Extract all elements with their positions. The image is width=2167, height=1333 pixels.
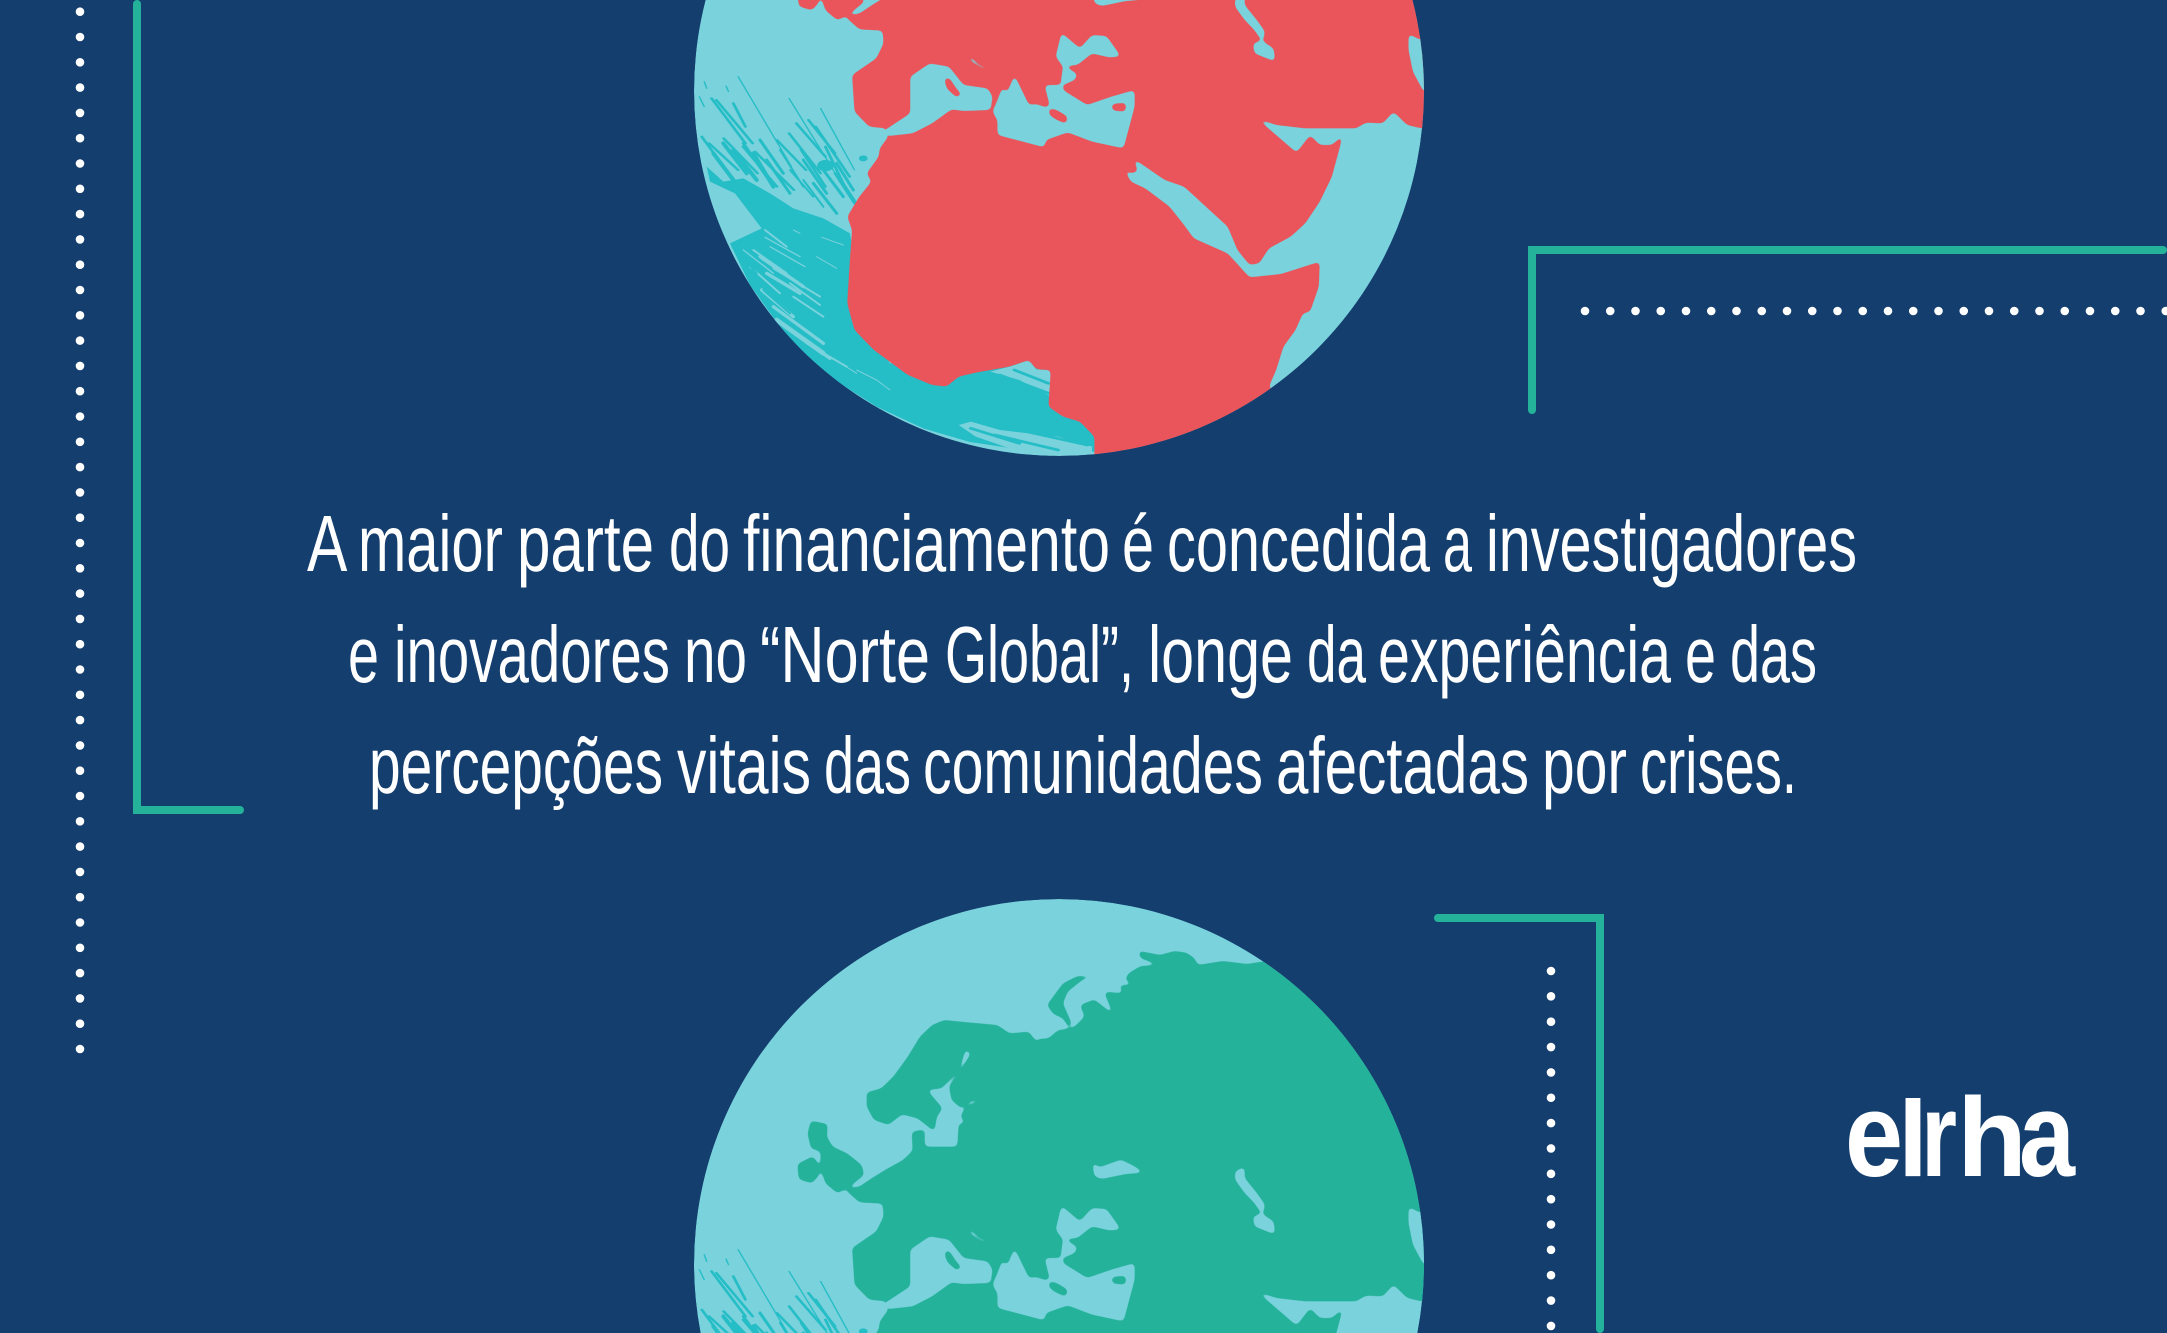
main statement text: por (1542, 721, 1627, 810)
main statement text: da (1307, 610, 1366, 699)
main statement text: maior (358, 499, 503, 588)
main statement text: investigadores (1486, 499, 1857, 588)
main statement text: e (348, 610, 379, 699)
main statement text: percepções (369, 721, 663, 810)
main statement text: inovadores (394, 610, 670, 699)
main statement text: é (1122, 499, 1154, 588)
logo: elrha: h (1957, 1075, 2027, 1200)
green corner bracket: bottom right (1438, 918, 1600, 1329)
main statement text: a (1443, 499, 1472, 588)
main statement text: crises. (1640, 721, 1797, 810)
logo: elrha: a (2019, 1068, 2076, 1202)
dotted line: left (76, 12, 84, 1052)
main statement text: e (1685, 610, 1716, 699)
main statement text: afectadas (1276, 721, 1529, 810)
main statement text: concedida (1167, 499, 1430, 588)
main statement text: do (669, 499, 730, 588)
logo: elrha: e (1845, 1068, 1903, 1202)
globe: red continents (top) (694, 0, 1424, 456)
main statement text: experiência (1378, 610, 1671, 699)
green corner bracket: left (137, 4, 240, 810)
main statement text: das (824, 721, 911, 810)
main statement text: no (684, 610, 747, 699)
green corner bracket: top right (1532, 250, 2163, 410)
main statement text: das (1730, 610, 1817, 699)
main statement text: financiamento (743, 499, 1110, 588)
main statement text: A (307, 499, 348, 588)
dotted line: top right (1585, 307, 2167, 315)
main statement text: parte (517, 499, 654, 588)
dotted line: bottom right (1547, 971, 1555, 1328)
globe: green continents (bottom) (694, 899, 1424, 1333)
logo: elrha: l (1898, 1078, 1928, 1199)
main statement text: “Norte (760, 610, 930, 699)
main statement text (307, 499, 1857, 810)
main statement text: vitais (677, 721, 811, 810)
logo: elrha: r (1921, 1068, 1957, 1202)
main statement text: Global”, (945, 610, 1134, 699)
main statement text: longe (1148, 610, 1293, 699)
main statement text: comunidades (923, 721, 1263, 810)
